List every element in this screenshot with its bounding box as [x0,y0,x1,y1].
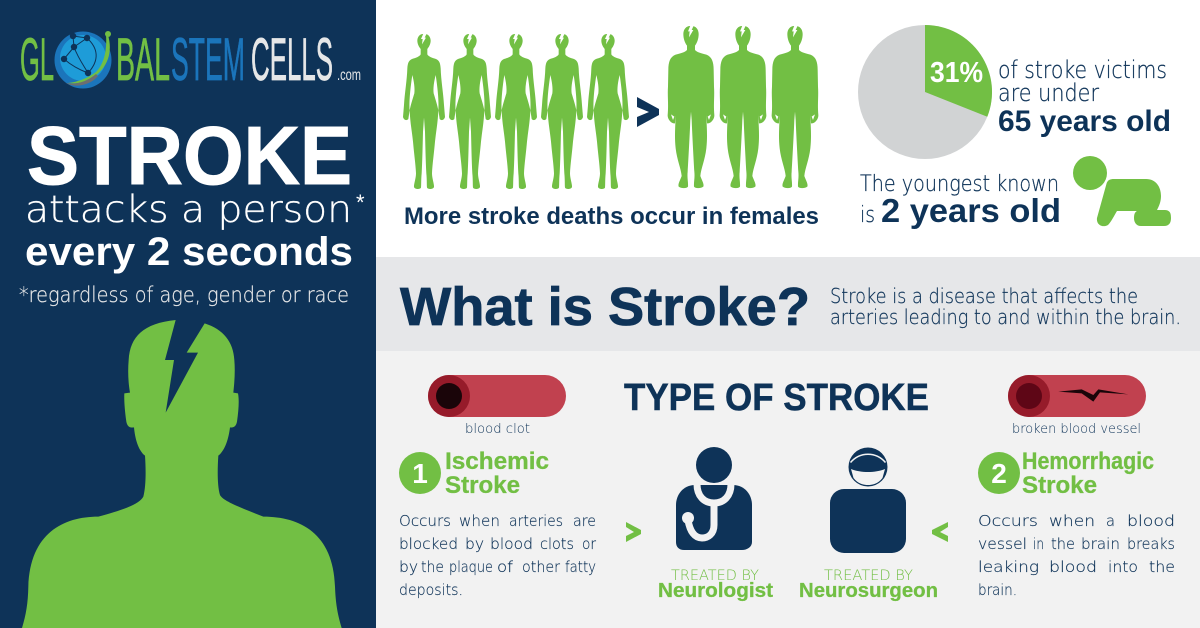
badge: number 1: 1 [412,458,428,489]
text: treated by neurologist: Neurologist [658,580,773,602]
text: ischemic description: blood [490,535,533,553]
text: treated by neurosurgeon [799,568,938,602]
chart: male figures [668,26,818,188]
heading: hemorrhagic stroke: Stroke [1022,472,1097,499]
text: hemorrhagic description: breaks [1127,535,1175,553]
text: hemorrhagic description: leaking [978,558,1039,576]
chart: 31 percent pie: 31% [930,57,983,89]
heading: STROKE: STROKE [27,109,352,202]
text: ischemic description: of [497,558,514,576]
logo: Global Stem Cells: STEM [171,26,245,93]
badge: number 2 [978,452,1020,494]
logo: Global Stem Cells: .com [337,67,361,84]
logo: Global Stem Cells: BAL [116,26,170,93]
icon: neurosurgeon [830,448,906,553]
text: hemorrhagic description: brain [1081,535,1120,553]
logo: Global Stem Cells [20,26,361,93]
heading: ischemic stroke: Stroke [445,472,520,499]
text: treated by neurosurgeon: Neurosurgeon [799,580,938,602]
text: ischemic description: fatty [565,558,596,576]
text: ischemic description: are [573,512,596,530]
text: hemorrhagic description [978,512,1175,599]
text: broken vessel label: broken blood vessel [1012,422,1141,437]
panel: what is stroke band [376,257,1200,351]
text: hemorrhagic description: into [1108,558,1138,576]
text: of stroke victims: 65 years old [998,105,1171,138]
chart: 31 percent pie [858,25,992,159]
text: ischemic description: Occurs [399,512,451,530]
text: ischemic description [399,512,597,599]
text: stroke definition: Stroke is a disease that affects the [830,284,1138,308]
text: hemorrhagic description: in [1033,535,1044,553]
text: hemorrhagic description: brain. [978,581,1017,599]
icon: green right chevron [626,522,641,542]
icon: crawling baby [1073,156,1171,226]
text: of stroke victims: are under [998,79,1099,107]
logo: Global Stem Cells: GL [20,26,54,93]
text: hemorrhagic description: blood [1049,558,1097,576]
icon: greater-than arrow [637,97,659,127]
text: ischemic description: blocked [399,535,458,553]
icon: broken vessel [1008,375,1146,417]
text: regardless note: *regardless of age, gender or race [19,283,349,307]
text: youngest known: The youngest known [860,172,1059,197]
text: every 2 seconds: every 2 seconds [25,230,353,274]
text: ischemic description: plaque [449,558,493,576]
heading: ischemic stroke [445,448,549,499]
text: youngest known: is [860,203,875,228]
text: attacks a person: attacks a person [25,188,352,231]
text: treated by neurologist: TREATED BY [671,568,759,584]
text: hemorrhagic description: the [1149,558,1175,576]
text: hemorrhagic description: Occurs [978,512,1038,530]
text: ischemic description: clots [540,535,574,553]
panel: left navy column [0,0,376,628]
text: ischemic description: deposits. [399,581,463,599]
text: of stroke victims [998,56,1171,138]
text: ischemic description: other [522,558,561,576]
text: hemorrhagic description: the [1051,535,1075,553]
icon: globe [54,31,112,88]
text: treated by neurosurgeon: TREATED BY [824,568,913,584]
icon: neurologist [676,447,752,550]
text: asterisk: * [356,190,365,215]
text: more stroke deaths: More stroke deaths occur in females [404,203,819,230]
heading: What is Stroke?: What is Stroke? [400,277,810,337]
icon: head and shoulders with lightning bolt [22,320,342,628]
heading: ischemic stroke: Ischemic [445,448,549,475]
heading: type of stroke: TYPE OF STROKE [624,377,929,419]
logo: Global Stem Cells: CELLS [251,26,333,93]
heading: hemorrhagic stroke [1022,448,1154,499]
text: stroke definition [830,284,1181,329]
text: treated by neurologist [658,568,773,602]
text: ischemic description: the [421,558,444,576]
text: blood clot label: blood clot [465,422,530,437]
text: hemorrhagic description: a [1106,512,1115,530]
text: ischemic description: by [465,535,484,553]
text: hemorrhagic description: vessel [978,535,1027,553]
text: hemorrhagic description: when [1049,512,1095,530]
text: youngest known: 2 years old [881,192,1061,229]
panel: type of stroke section [376,351,1200,628]
heading: hemorrhagic stroke: Hemorrhagic [1022,448,1154,475]
badge: number 1 [399,452,441,494]
badge: number 2: 2 [991,458,1007,489]
text: youngest known [860,172,1061,229]
text: ischemic description: when [459,512,500,530]
text: of stroke victims: of stroke victims [998,56,1167,84]
icon: blood clot vessel [428,375,566,417]
text: hemorrhagic description: blood [1127,512,1175,530]
text: ischemic description: or [582,535,597,553]
chart: female figures [403,34,629,189]
icon: green left chevron [932,522,948,542]
text: ischemic description: arteries [509,512,563,530]
text: ischemic description: by [399,558,418,576]
